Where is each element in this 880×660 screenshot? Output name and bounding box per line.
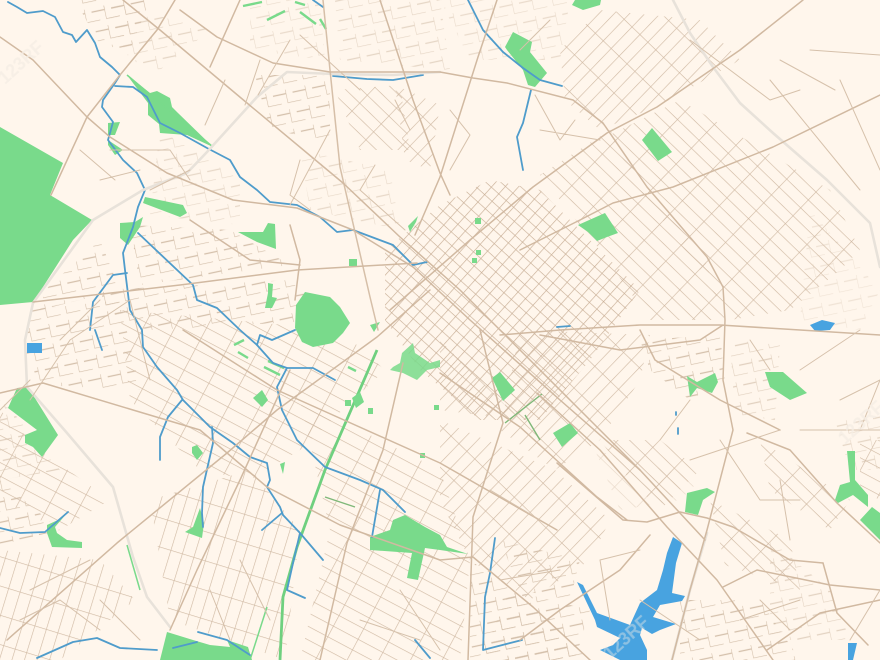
park: south-west greens bbox=[8, 387, 268, 548]
river: central creek bbox=[138, 233, 405, 512]
park: riverside north-west bbox=[127, 75, 213, 147]
lake: south reservoir bbox=[577, 537, 685, 660]
park: western block bbox=[238, 223, 276, 249]
park: side corridor strip bbox=[127, 75, 267, 660]
park: golf strips bbox=[234, 2, 356, 375]
park: small L shape bbox=[265, 283, 277, 308]
river: north creek bbox=[115, 86, 427, 265]
park: rail corridor strip bbox=[280, 350, 377, 660]
park: university green bbox=[390, 343, 440, 380]
park: central oval bbox=[295, 292, 350, 347]
lake: east pond bbox=[810, 320, 835, 331]
river: main west creek bbox=[8, 2, 323, 560]
park: small river greens bbox=[108, 122, 187, 245]
park: big west park bbox=[0, 127, 92, 305]
park: dark lane strips bbox=[325, 394, 542, 507]
park: small square bbox=[349, 259, 357, 266]
park: small square greens bbox=[280, 216, 481, 474]
lake: bottom right bbox=[848, 643, 857, 660]
river: side creeks bbox=[0, 0, 678, 658]
park: bottom park bbox=[160, 632, 252, 660]
park: top greens bbox=[505, 0, 672, 241]
park: south-east greens bbox=[492, 372, 880, 540]
park: large south park bbox=[370, 515, 468, 580]
lake: west pond bbox=[27, 343, 42, 353]
